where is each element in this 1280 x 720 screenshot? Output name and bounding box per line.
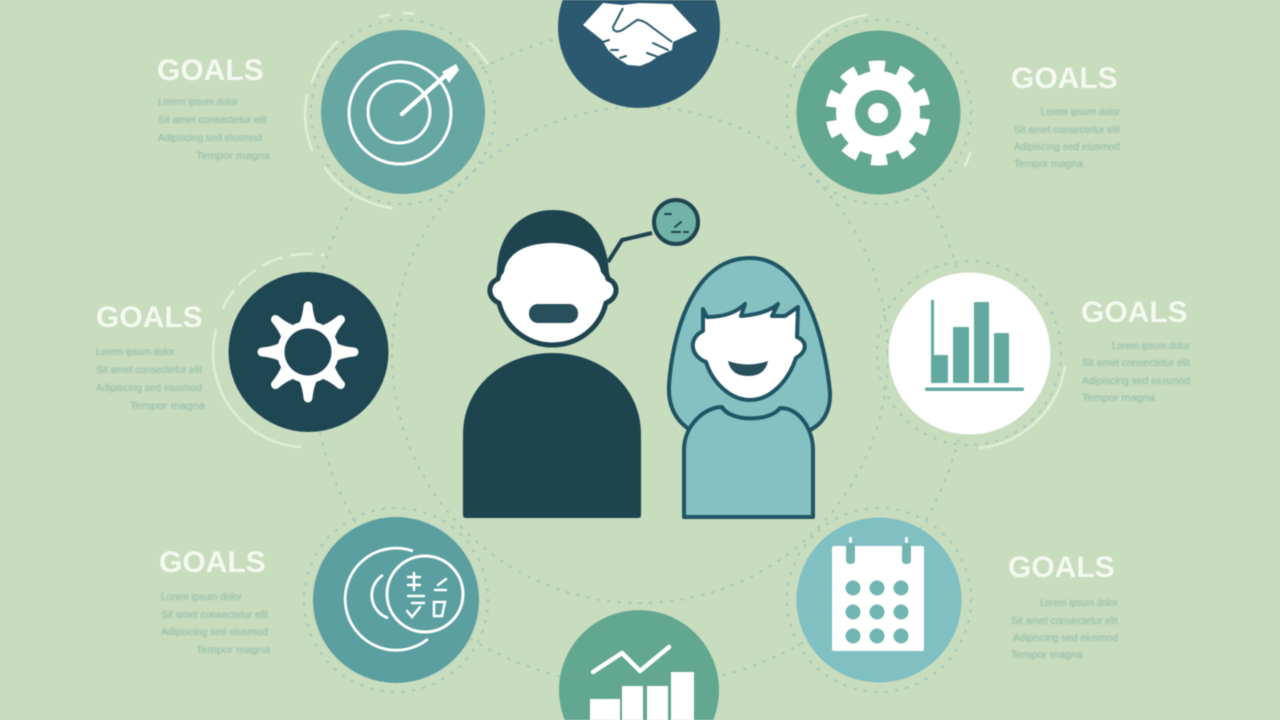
text block: bottom right description: Adipiscing sed eiusmod [1013, 633, 1118, 644]
heading: goals bottom left: GOALS [159, 546, 266, 579]
man mouth [529, 304, 578, 323]
text block: bottom left description: Sit amet consectetur elit [161, 610, 268, 621]
panel: calendar goal [796, 518, 1119, 682]
woman hair [669, 258, 830, 431]
text block: top right description: Tempor magna [1014, 159, 1083, 170]
text block: bottom right description: Sit amet consectetur elit [1011, 616, 1118, 627]
thought bubble [654, 200, 698, 244]
text block: right description: Lorem ipsum dolor [1112, 341, 1191, 352]
text block: bottom left description: Tempor magna [196, 645, 270, 656]
panel: chart goal [888, 272, 1191, 448]
icon: gear [793, 15, 970, 194]
figure: man [463, 200, 698, 518]
panel: growth chart [559, 610, 719, 720]
panel: handshake [558, 0, 720, 108]
icon: handshake [583, 3, 697, 66]
icon: bar chart [888, 272, 1065, 448]
text block: top left description: Tempor magna [196, 151, 270, 162]
text block: bottom right description: Lorem ipsum dolor [1040, 598, 1119, 609]
text block: bottom left description: Lorem ipsum dolor [161, 592, 243, 603]
heading: goals right: GOALS [1081, 296, 1188, 329]
panel: settings goal [793, 15, 1121, 194]
text block: top right description: Sit amet consectetur elit [1014, 125, 1120, 136]
icon: calendar [796, 518, 962, 682]
text block: left description: Tempor magna [130, 401, 205, 412]
figure: woman [669, 258, 830, 517]
text block: left description: Adipiscing sed eiusmod [96, 383, 202, 394]
text block: bottom left description [161, 592, 270, 656]
woman face [693, 304, 805, 400]
text block: left description: Lorem ipsum dolor [96, 347, 176, 358]
man body [463, 353, 641, 518]
text block: top right description: Lorem ipsum dolor [1041, 107, 1121, 118]
heading: goals left: GOALS [96, 301, 203, 334]
text block: bottom right description [1011, 598, 1119, 661]
icon: overlapping circles [313, 517, 479, 683]
text block: right description [1082, 341, 1191, 404]
text block: left description: Sit amet consectetur elit [96, 365, 202, 376]
heading: goals top right: GOALS [1011, 62, 1118, 95]
text block: right description: Adipiscing sed eiusmod [1082, 376, 1190, 387]
speech connector [608, 233, 652, 262]
text block: bottom left description: Adipiscing sed eiusmod [161, 627, 268, 638]
text block: bottom right description: Tempor magna [1011, 650, 1083, 661]
text block: right description: Tempor magna [1082, 393, 1155, 404]
text block: top left description [158, 97, 270, 162]
text block: top left description: Sit amet consectetur elit [158, 115, 267, 126]
text block: top left description: Adipiscing sed eiusmod [158, 133, 262, 144]
woman mouth [728, 361, 768, 376]
panel: sun goal [96, 254, 388, 447]
woman body [684, 407, 813, 517]
text block: right description: Sit amet consectetur elit [1082, 358, 1190, 369]
panel: target goal [157, 13, 487, 208]
man head [490, 240, 616, 345]
man hair [497, 210, 609, 282]
icon: target [305, 13, 487, 208]
text block: left description [96, 347, 205, 412]
text block: top right description: Adipiscing sed eiusmod [1014, 142, 1120, 153]
icon: sun cog [213, 254, 388, 447]
heading: goals top left: GOALS [157, 54, 264, 87]
text block: top left description: Lorem ipsum dolor [158, 97, 239, 108]
text block: top right description [1014, 107, 1121, 170]
panel: overlap goal [159, 517, 479, 683]
icon: growth bars and trend line [590, 647, 694, 720]
heading: goals bottom right: GOALS [1008, 551, 1115, 584]
